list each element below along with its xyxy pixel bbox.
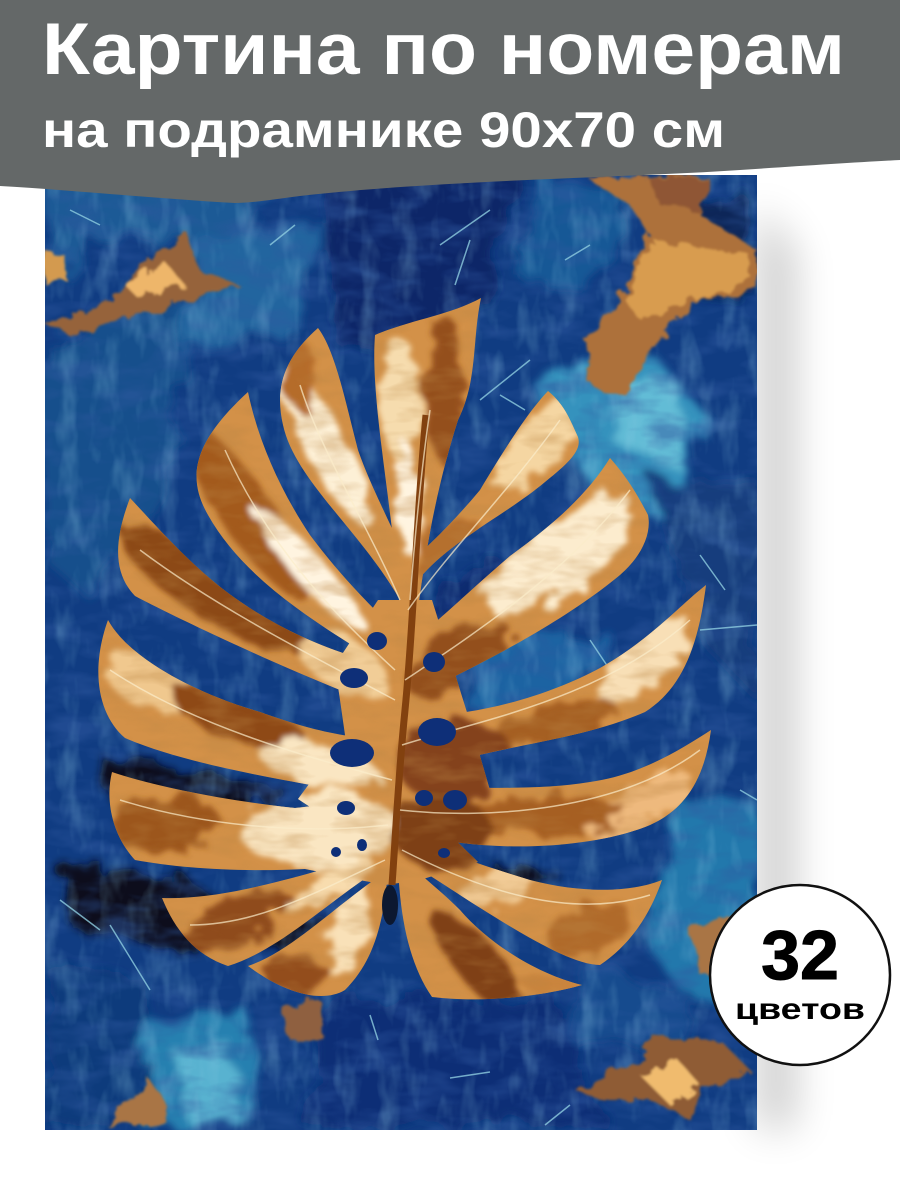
painting canvas xyxy=(45,175,757,1130)
badge caption: цветов xyxy=(735,993,865,1026)
gold patch: top right xyxy=(585,178,757,395)
leaf veins xyxy=(110,385,700,925)
paint scratches xyxy=(60,210,757,1125)
leaf holes xyxy=(330,632,467,925)
badge: 32 colours xyxy=(710,885,890,1065)
title: Картина по номерам xyxy=(42,9,845,90)
painted background xyxy=(45,175,757,1130)
dark brush texture xyxy=(45,175,757,1130)
leaf midrib xyxy=(392,415,426,885)
gold patch: top left xyxy=(45,230,240,335)
leaf lobes with paint mottling xyxy=(98,298,711,1000)
canvas drop shadow xyxy=(110,205,795,1128)
gold patch: bottom left xyxy=(105,1000,325,1125)
light brush texture xyxy=(45,175,757,1130)
badge number: 32 xyxy=(761,916,839,994)
gold patch: bottom right xyxy=(575,915,750,1120)
monstera leaf xyxy=(98,298,711,1000)
top banner xyxy=(0,0,900,203)
leaf brush texture xyxy=(110,311,710,998)
subtitle: на подрамнике 90х70 см xyxy=(42,102,725,158)
